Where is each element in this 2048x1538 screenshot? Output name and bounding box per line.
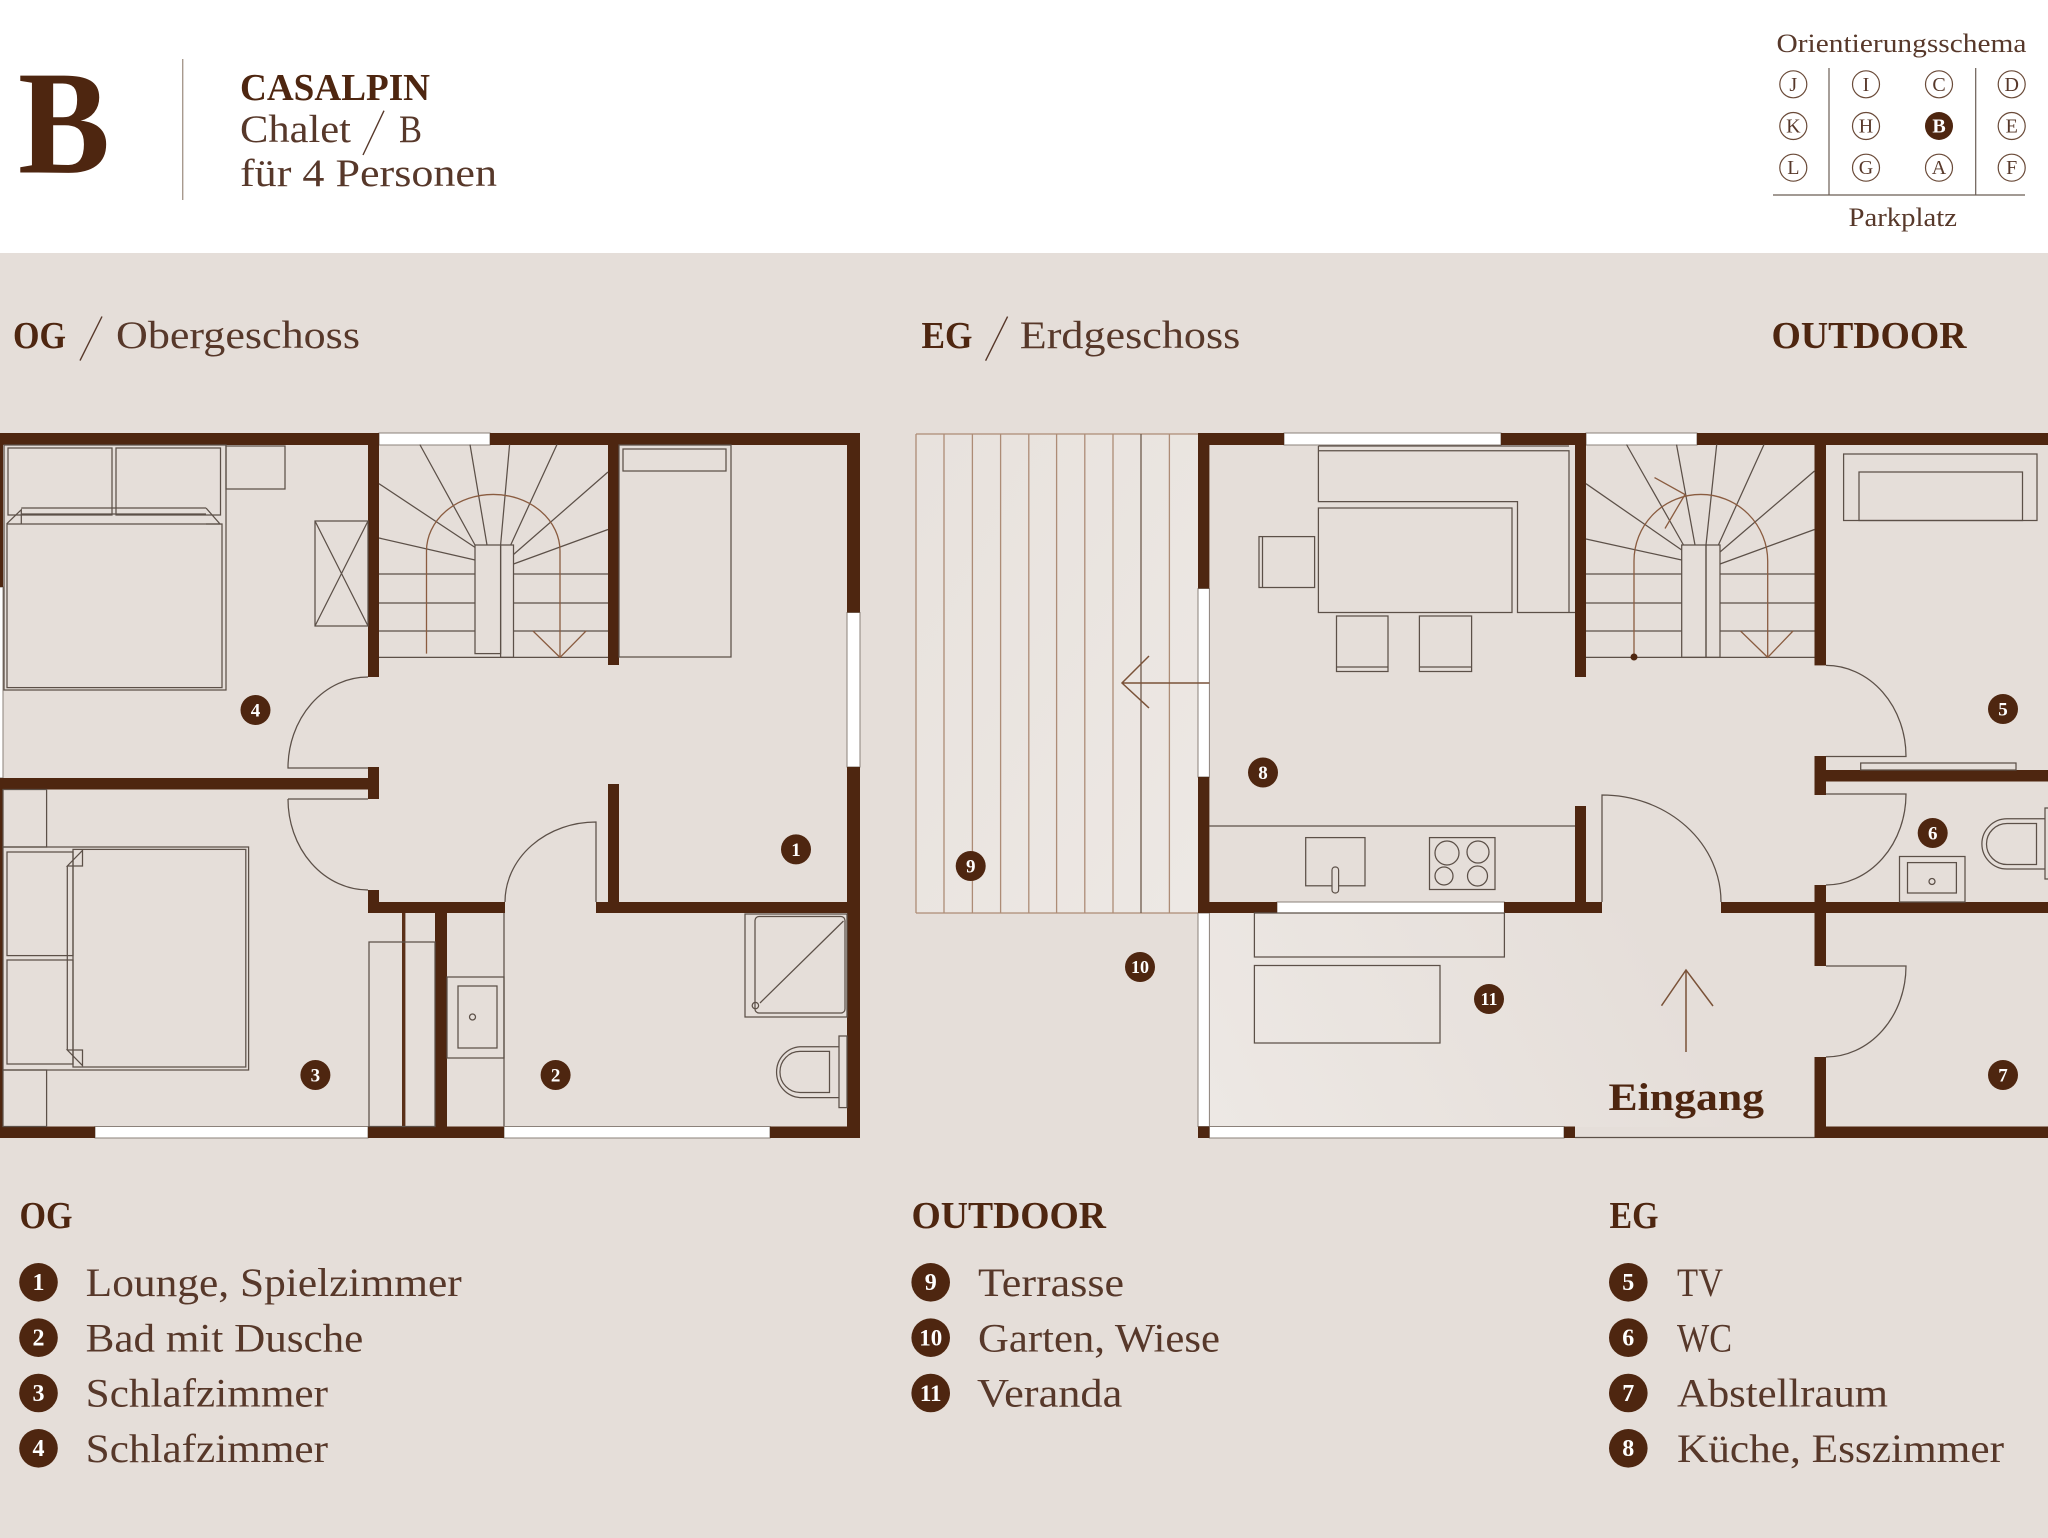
section heading: OG: Obergeschoss	[116, 314, 360, 357]
legend item 3: Schlafzimmer	[86, 1371, 328, 1416]
windows ground floor	[1198, 433, 1697, 1138]
dining furniture	[1259, 446, 1575, 672]
legend item 11: 11	[920, 1381, 942, 1406]
legend item 10: Garten, Wiese	[978, 1315, 1220, 1360]
staircase ground floor	[1586, 444, 1814, 660]
legend item 7: Abstellraum	[1677, 1371, 1888, 1416]
chalet letters grid: A	[1932, 157, 1947, 179]
chalet letters grid: F	[2006, 157, 2017, 179]
WC fixtures	[1900, 808, 2048, 902]
legend: OUTDOOR	[911, 1195, 1220, 1416]
room number 3: 3	[311, 1066, 320, 1086]
kitchen counter	[1209, 826, 1575, 893]
capacity: für 4 Personen	[240, 152, 497, 195]
room number 5	[1988, 694, 2018, 724]
legend: EG	[1609, 1195, 2004, 1471]
windows upper floor	[0, 433, 860, 1138]
chalet letters grid: D	[2004, 74, 2019, 96]
section heading: OUTDOOR: OUTDOOR	[1772, 315, 1967, 357]
door swings ground floor	[1602, 665, 1906, 1057]
room number 10: 10	[1131, 957, 1149, 977]
room number 6: 6	[1928, 824, 1937, 844]
chalet letters grid: C	[1932, 74, 1946, 96]
walls upper floor	[0, 433, 860, 1138]
chalet letters grid: I	[1863, 74, 1869, 96]
entrance label: Eingang	[1608, 1076, 1765, 1119]
room number 3	[300, 1060, 330, 1090]
legend item 5: 5	[1622, 1270, 1634, 1296]
bathroom fixtures	[447, 913, 847, 1126]
legend item 5	[1609, 1260, 1723, 1305]
room number 9	[956, 851, 986, 881]
legend item 3: 3	[32, 1381, 44, 1407]
legend heading OUTDOOR: OUTDOOR	[912, 1195, 1107, 1237]
legend item 1: 1	[32, 1270, 44, 1296]
terrace decking	[916, 434, 1198, 913]
door swings upper floor	[288, 677, 596, 902]
legend item 7: 7	[1622, 1381, 1634, 1407]
room number 8: 8	[1258, 763, 1268, 784]
legend item 6: WC	[1677, 1315, 1732, 1360]
legend item 10: 10	[919, 1326, 942, 1350]
chalet letters grid: L	[1787, 157, 1799, 179]
chalet letters grid: B	[1932, 116, 1946, 138]
legend heading OG: OG	[20, 1195, 72, 1237]
legend: OG	[19, 1195, 462, 1471]
TV room sofa	[1844, 454, 2037, 770]
room number 7: 7	[1998, 1066, 2008, 1086]
section heading: EG: EG	[922, 315, 972, 357]
room number 9: 9	[966, 856, 975, 878]
veranda furniture	[1254, 913, 1504, 1043]
walls ground floor	[1198, 433, 2048, 1138]
chalet type: Chalet	[240, 108, 351, 151]
section heading: OG	[13, 314, 360, 361]
room number 2	[541, 1060, 571, 1090]
room number 2: 2	[551, 1066, 560, 1086]
room number 4	[240, 695, 270, 725]
legend item 4: 4	[32, 1436, 44, 1462]
legend item 9: Terrasse	[978, 1260, 1124, 1305]
legend item 8: Küche, Esszimmer	[1677, 1426, 2004, 1471]
room number 7	[1988, 1060, 2018, 1090]
large letter B: B	[18, 42, 110, 206]
room number 11: 11	[1480, 989, 1498, 1009]
legend item 9	[911, 1260, 1124, 1305]
chalet letters grid: G	[1859, 157, 1873, 179]
room number 1	[781, 834, 811, 864]
legend item 11: Veranda	[977, 1371, 1123, 1416]
section heading: EG: Erdgeschoss	[1020, 314, 1240, 357]
chalet letters grid: E	[2006, 116, 2018, 138]
chalet letters grid: K	[1786, 116, 1801, 138]
header: chalet title block	[18, 42, 497, 206]
orientation schema	[1773, 29, 2027, 232]
legend item 6	[1609, 1315, 1732, 1360]
room number 5: 5	[1998, 700, 2008, 720]
legend heading EG: EG	[1610, 1195, 1658, 1237]
room number 11	[1474, 984, 1504, 1014]
staircase upper floor	[379, 444, 608, 657]
arrow to terrace	[1122, 656, 1209, 708]
lounge bed furniture	[619, 445, 731, 657]
entrance arrow	[1662, 970, 1713, 1052]
legend item 1: Lounge, Spielzimmer	[86, 1260, 462, 1305]
room number 6	[1918, 818, 1948, 848]
bed room 4 furniture	[4, 445, 368, 690]
section heading: EG	[922, 314, 1240, 361]
room number 10	[1125, 952, 1155, 982]
room number 1: 1	[791, 840, 801, 861]
legend item 11	[911, 1371, 1123, 1416]
orientation heading: Orientierungsschema	[1776, 29, 2027, 58]
legend item 2: 2	[32, 1326, 44, 1352]
chalet type	[240, 108, 422, 155]
legend item 8: 8	[1622, 1436, 1634, 1462]
legend item 2: Bad mit Dusche	[86, 1315, 363, 1360]
chalet letters grid: J	[1789, 74, 1797, 96]
floor plan: ground floor	[956, 433, 2048, 1138]
legend item 5: TV	[1677, 1260, 1723, 1305]
chalet name: CASALPIN	[240, 67, 430, 109]
chalet letters grid: H	[1859, 116, 1873, 138]
veranda floor	[1209, 913, 1815, 1127]
floor plan: upper floor	[0, 433, 860, 1138]
room number 8	[1248, 758, 1278, 788]
legend item 9: 9	[925, 1270, 937, 1296]
section heading: OG: OG	[13, 315, 66, 357]
bed room 3 furniture	[3, 790, 435, 1126]
legend item 6: 6	[1622, 1326, 1634, 1352]
legend item 4: Schlafzimmer	[86, 1426, 328, 1471]
room number 4: 4	[251, 700, 261, 722]
chalet type: B	[399, 108, 422, 151]
parking label: Parkplatz	[1848, 203, 1957, 232]
chalet letters grid	[1780, 71, 2025, 181]
